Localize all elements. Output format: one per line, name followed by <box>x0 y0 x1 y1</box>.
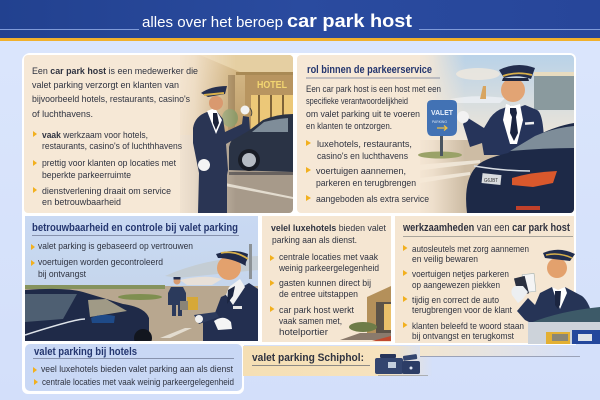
illustration: airport with host, valet sign and car <box>415 55 574 213</box>
figure: host with keys and card <box>511 250 594 323</box>
illustration: hotel entrance with host and car: HOTEL <box>257 80 287 91</box>
bullet list: en veilig bewaren <box>412 254 478 265</box>
illustration: hotel entrance with host and car <box>172 55 293 213</box>
heading: werkzaamheden: werkzaamheden van een car park host <box>402 222 570 234</box>
hotel intro text <box>271 224 386 245</box>
panel: rol binnen de parkeerservice <box>297 55 574 213</box>
role text <box>306 84 441 132</box>
bullet list: prettig voor klanten op locaties met <box>42 158 176 169</box>
bullet list: bij ontvangst en terugkomst <box>412 331 514 342</box>
bullet list <box>306 139 429 205</box>
bullet list: de entree uitstappen <box>279 289 358 300</box>
bullet list: beperkte parkeerruimte <box>42 170 131 181</box>
intro text: valet parking verzorgt en klanten van <box>32 80 179 91</box>
figure: small host with luggage <box>168 277 198 316</box>
icon: valet sign: VALET <box>431 110 454 117</box>
title <box>142 11 412 31</box>
heading: valet parking bij hotels: valet parking bij hotels <box>34 346 137 358</box>
role text: om valet parking uit te voeren <box>306 109 420 120</box>
hotel intro text: velel luxehotels bieden valet <box>271 223 386 234</box>
bullet list: veel luxehotels bieden valet parking aan als dienst <box>41 364 233 375</box>
title: alles over het beroep <box>142 14 283 31</box>
intro text <box>32 66 198 120</box>
header banner <box>0 0 600 41</box>
icon: valet sign <box>427 100 457 156</box>
role text: en klanten te ontzorgen. <box>306 121 392 132</box>
bullet list: bij ontvangst <box>38 269 86 280</box>
bullet list: aangeboden als extra service <box>316 194 429 205</box>
panel: introduction <box>24 55 293 213</box>
bullet list: centrale locaties met vaak weinig parkeergelegenheid <box>42 377 234 388</box>
bullet list: centrale locaties met vaak <box>279 252 378 263</box>
figure: car park host with valet sign <box>457 65 544 155</box>
role text: Een car park host is een host met een <box>306 84 441 95</box>
bullet list: gasten kunnen direct bij <box>279 278 371 289</box>
bullet list: op aangewezen piekken <box>412 280 500 291</box>
intro text: Een car park host is een medewerker die <box>32 66 198 77</box>
icon: valet sign: PARKING <box>432 120 447 124</box>
figure: host with tablet <box>194 251 258 341</box>
bullet list: vaak samen met, <box>279 316 342 327</box>
bullet list <box>270 252 379 338</box>
bullet list: autosleutels met zorg aannemen <box>412 244 529 255</box>
heading: rol binnen de parkeerservice: rol binnen de parkeerservice <box>307 64 432 76</box>
intro text: of luchthavens. <box>32 109 93 120</box>
panel: valet parking Schiphol <box>243 346 580 376</box>
bullet list: klanten beleefd te woord staan <box>412 321 524 332</box>
illustration: navy car rear: G6JBT <box>484 178 498 184</box>
bullet list: valet parking is gebaseerd op vertrouwen <box>38 241 193 252</box>
panel: valet parking bij hotels <box>25 344 242 391</box>
bullet list: weinig parkeergelegenheid <box>278 263 379 274</box>
role text: specifieke verantwoordelijkheid <box>306 96 408 107</box>
bullet list: voertuigen aannemen, <box>316 166 406 177</box>
icon: luggage cameras <box>375 354 428 376</box>
bullet list <box>31 241 193 280</box>
bullet list: tijdig en correct de auto <box>412 295 499 306</box>
illustration: navy car rear <box>466 123 574 213</box>
bullet list: casino's en luchthavens <box>317 151 408 162</box>
bullet list: terugbrengen voor de klant <box>412 305 512 316</box>
bullet list: hotelportier <box>279 327 328 338</box>
heading: betrouwbaarheid en controle bij valet parking: betrouwbaarheid en controle bij valet parking <box>32 222 238 234</box>
bullet list: restaurants, casino's of luchthhavens <box>42 141 182 152</box>
figure: car park host with keys <box>193 86 252 213</box>
panel: betrouwbaarheid en controle <box>25 216 258 347</box>
bullet list: luxehotels, restaurants, <box>317 139 412 150</box>
illustration: dark car <box>25 289 152 347</box>
bullet list: voertuigen worden gecontroleerd <box>38 257 163 268</box>
panel: werkzaamheden <box>395 216 600 344</box>
hotel intro text: parking aan als dienst. <box>272 235 357 246</box>
bullet list: en betrouwbaarheid <box>42 197 121 208</box>
white frame <box>22 53 576 394</box>
bullet list: parkeren en terugbrengen <box>316 178 416 189</box>
illustration: airport apron with car and host <box>25 244 258 347</box>
bullet list: vaak werkzaam voor hotels, <box>42 130 148 141</box>
heading: valet parking Schiphol: valet parking Schiphol: <box>252 352 364 364</box>
bullet list <box>403 244 529 342</box>
title: car park host <box>287 11 412 31</box>
bullet list: voertuigen netjes parkeren <box>412 269 509 280</box>
panel: velel luxehotels <box>262 216 391 342</box>
illustration: small hotel entrance <box>340 286 391 341</box>
illustration: car roof and bumper <box>528 307 600 344</box>
intro text: bijvoorbeeld hotels, restaurants, casino's <box>32 94 190 105</box>
bullet list <box>33 130 182 208</box>
bullet list: car park host werkt <box>279 305 354 316</box>
bullet list <box>33 364 234 388</box>
bullet list: dienstverlening draait om service <box>42 186 171 197</box>
